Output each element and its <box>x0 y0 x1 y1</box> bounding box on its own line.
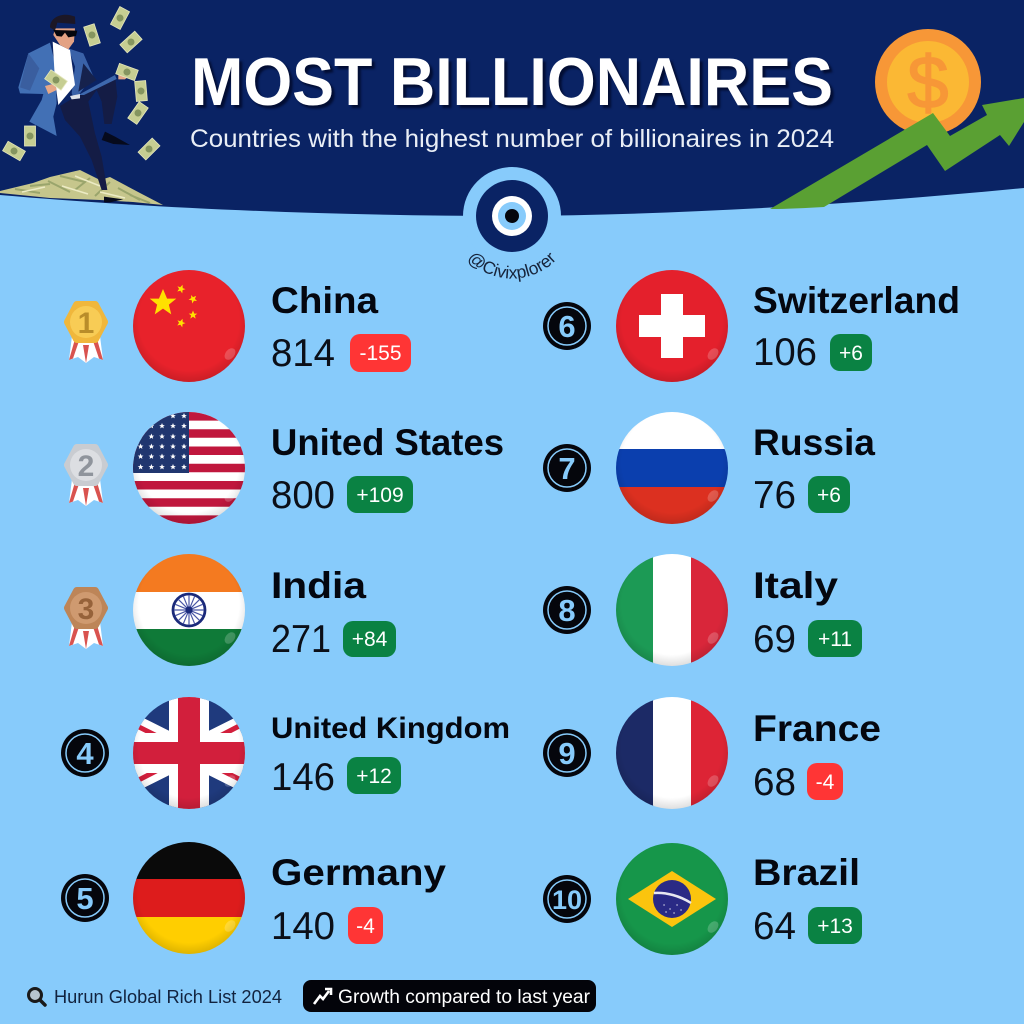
row 6: Switzerland <box>543 270 960 382</box>
row 7: Russia <box>543 412 875 524</box>
change badge: +12 <box>356 765 392 788</box>
name: China <box>271 280 378 321</box>
flag: China <box>133 270 245 382</box>
count: 106 <box>753 331 817 374</box>
hair <box>50 15 75 31</box>
change badge <box>348 907 383 944</box>
rank badge <box>543 302 591 350</box>
count: 69 <box>753 618 796 661</box>
name: United Kingdom <box>271 712 510 745</box>
row 2: United States <box>68 412 504 524</box>
change badge <box>808 620 862 657</box>
icon: green growth arrow <box>770 98 1024 209</box>
logo: evil eye <box>463 167 561 265</box>
silver medal <box>68 448 104 506</box>
rank badge <box>543 444 591 492</box>
sunglasses <box>53 30 77 37</box>
flag: Germany <box>133 842 245 954</box>
change badge <box>347 757 401 794</box>
handle text: @Civixplorer <box>468 252 555 282</box>
change badge <box>343 621 396 657</box>
rank badge: 4 <box>76 736 94 771</box>
count: 800 <box>271 474 335 517</box>
change badge: +13 <box>817 915 853 938</box>
change badge <box>830 334 872 371</box>
bronze medal <box>68 591 104 649</box>
silver medal: 2 <box>78 450 94 483</box>
count: 64 <box>753 905 796 948</box>
name: Italy <box>753 565 838 606</box>
source icon: magnifier <box>28 988 45 1005</box>
name: Brazil <box>753 852 860 893</box>
count: 146 <box>271 756 335 799</box>
change badge: -155 <box>359 342 402 365</box>
hands <box>45 74 130 94</box>
row 5: Germany <box>61 842 446 954</box>
source text: Hurun Global Rich List 2024 <box>54 986 282 1007</box>
flag: Brazil <box>616 843 728 955</box>
row 3: India <box>68 554 396 666</box>
belt <box>70 94 80 99</box>
subtitle: Countries with the highest number of billionaires in 2024 <box>190 125 834 153</box>
face <box>53 28 75 49</box>
name: Germany <box>271 852 446 893</box>
title: MOST BILLIONAIRES <box>191 44 833 120</box>
row 1: China <box>68 270 411 382</box>
change badge <box>808 476 850 513</box>
bronze medal: 3 <box>78 593 94 626</box>
legend pill <box>303 980 596 1012</box>
name: India <box>271 565 366 606</box>
flying bills <box>3 7 160 161</box>
flag: United Kingdom <box>133 697 245 809</box>
rank badge: 10 <box>552 885 582 915</box>
icon: growth arrow <box>314 989 331 1004</box>
change badge <box>808 907 862 944</box>
count: 271 <box>271 618 331 661</box>
jacket <box>18 43 57 136</box>
flag: Italy <box>616 554 728 666</box>
change badge: +11 <box>818 628 852 651</box>
row 10: Brazil <box>543 843 862 955</box>
flag: Switzerland <box>616 270 728 382</box>
jacket shadow <box>20 53 39 91</box>
name: France <box>753 708 881 749</box>
rank badge <box>543 875 591 923</box>
handle <box>458 247 566 279</box>
illustration: businessman throwing money <box>0 7 163 205</box>
legend text: Growth compared to last year <box>338 987 591 1008</box>
rank badge: 7 <box>558 451 576 486</box>
change badge: +6 <box>839 342 863 365</box>
change badge: -4 <box>816 771 835 794</box>
flag: India <box>133 554 245 666</box>
change badge: +109 <box>356 484 404 507</box>
flag: United States <box>133 412 245 524</box>
icon: dollar coin: $ <box>907 41 949 124</box>
rank badge <box>61 874 109 922</box>
flag: France <box>616 697 728 809</box>
rank badge: 9 <box>558 736 576 771</box>
name: Russia <box>753 422 875 463</box>
gold medal <box>68 305 104 363</box>
money pile <box>0 170 163 205</box>
row 8: Italy <box>543 554 862 666</box>
change badge: +84 <box>352 628 388 651</box>
flag: Russia <box>616 412 728 524</box>
rank badge <box>543 729 591 777</box>
change badge <box>347 476 413 513</box>
change badge: -4 <box>356 915 375 938</box>
header banner <box>0 0 1024 216</box>
rank badge: 5 <box>76 881 94 916</box>
name: United States <box>271 422 504 463</box>
planted shoe <box>104 197 123 202</box>
shirt <box>53 42 75 105</box>
row 9: France <box>543 697 881 809</box>
name: Switzerland <box>753 280 960 321</box>
man figure <box>18 15 130 202</box>
rank badge: 8 <box>558 593 576 628</box>
rank badge <box>61 729 109 777</box>
row 4: United Kingdom <box>61 694 510 812</box>
legend <box>303 980 596 1012</box>
change badge <box>350 334 411 372</box>
jacket right side <box>68 48 95 100</box>
rank badge: 6 <box>558 309 576 344</box>
count: 76 <box>753 474 796 517</box>
change badge <box>807 763 843 800</box>
thigh highlight <box>78 75 117 95</box>
change badge: +6 <box>817 484 841 507</box>
count: 68 <box>753 761 796 804</box>
rank badge <box>543 586 591 634</box>
count: 814 <box>271 332 335 375</box>
trousers <box>60 75 117 190</box>
icon: dollar coin <box>875 29 981 135</box>
gold medal: 1 <box>78 307 94 340</box>
raised shoe <box>102 132 130 145</box>
count: 140 <box>271 905 335 948</box>
jacket lining <box>78 63 97 92</box>
